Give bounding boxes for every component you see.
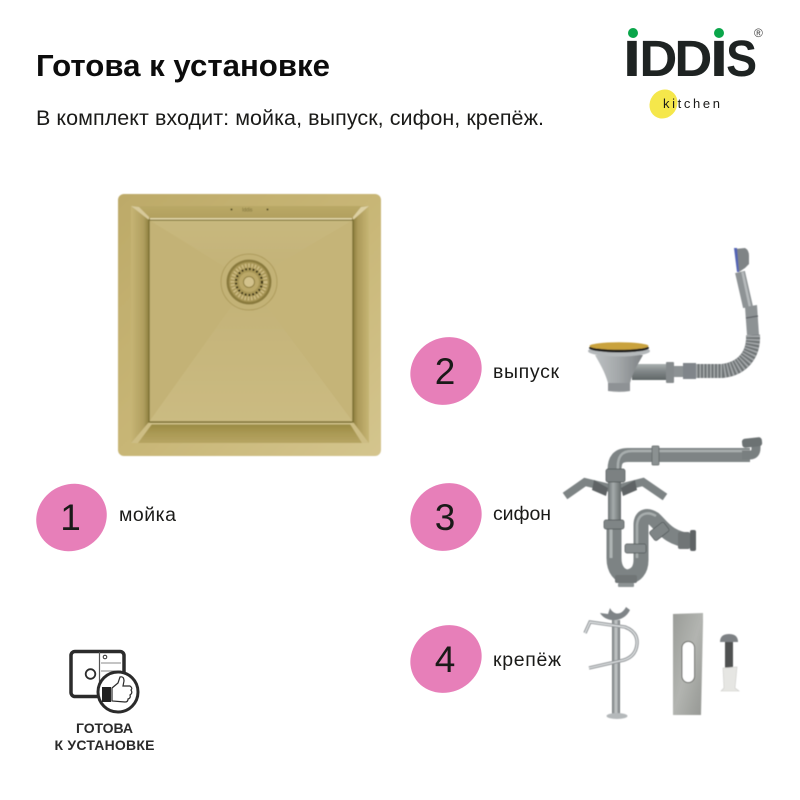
- badge 4: 4: [435, 639, 455, 680]
- sink floor facets: [149, 220, 353, 422]
- icon caption: ГОТОВА: [76, 720, 133, 736]
- badge 2: 2: [435, 351, 455, 392]
- icon caption: [54, 720, 154, 753]
- subtitle: В комплект входит: мойка, выпуск, сифон, крепёж.: [36, 106, 544, 130]
- badge 1: [24, 471, 119, 564]
- logo: IDDIS kitchen: D: [674, 30, 712, 87]
- label: крепёж: крепёж: [493, 649, 561, 671]
- sink brand mark: [230, 208, 268, 214]
- logo: IDDIS kitchen: I: [710, 29, 728, 87]
- badge 3: 3: [435, 497, 455, 538]
- siphon photo: [565, 437, 762, 587]
- logo: IDDIS kitchen: I: [623, 29, 641, 87]
- drain outlet photo: [588, 248, 759, 392]
- badge 3: [398, 470, 494, 564]
- logo: IDDIS kitchen: S: [726, 31, 757, 88]
- fasteners photo: [585, 607, 739, 719]
- icon: ready to install: [71, 652, 138, 712]
- drain: [221, 254, 277, 310]
- label: сифон: сифон: [493, 503, 551, 525]
- label: мойка: мойка: [119, 504, 176, 526]
- sink brand mark: Iddis: [242, 208, 253, 214]
- title: Готова к установке: [36, 48, 330, 83]
- logo: IDDIS kitchen: kitchen: [663, 96, 720, 111]
- icon caption: К УСТАНОВКЕ: [54, 737, 154, 753]
- logo: IDDIS kitchen: ®: [754, 26, 763, 40]
- badge 2: [398, 324, 494, 418]
- badge 4: [398, 612, 494, 706]
- clamp plate: [673, 613, 703, 715]
- label: выпуск: выпуск: [493, 361, 559, 383]
- sink photo: [118, 194, 381, 456]
- logo: IDDIS kitchen: [623, 26, 763, 124]
- screw and anchor: [720, 634, 739, 691]
- bracket bolt: [585, 607, 637, 719]
- logo: IDDIS kitchen: D: [639, 30, 677, 87]
- badge 1: 1: [60, 497, 81, 538]
